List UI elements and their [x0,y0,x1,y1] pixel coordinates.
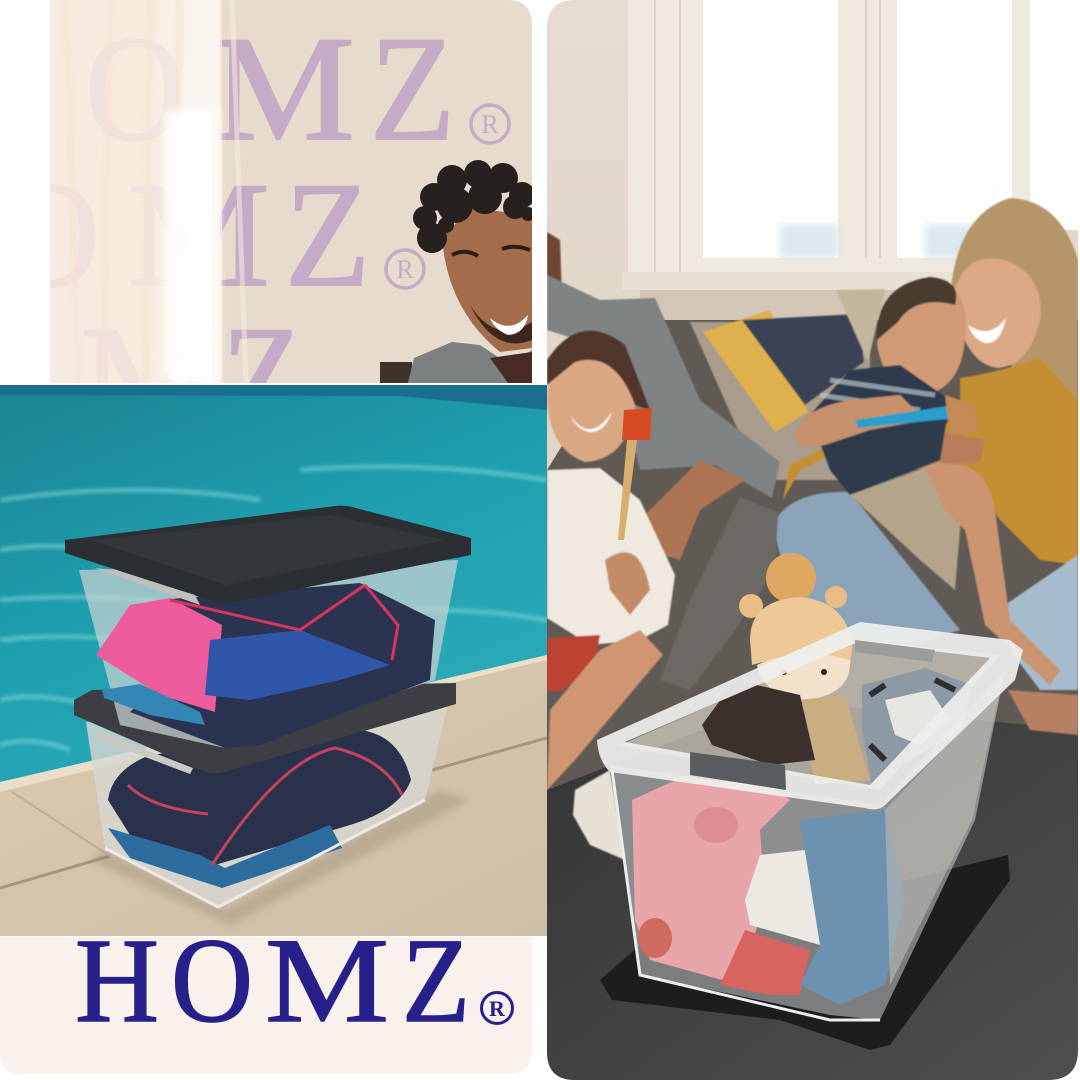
black bin base [600,855,1010,1050]
heading: repeated wall logo: M [80,296,223,462]
white plush [745,850,820,945]
leopard plush [862,668,972,785]
heading: repeated wall logo: M [212,6,355,172]
logo registered mark [482,992,512,1024]
woman [772,198,1078,735]
mallet toy [618,408,652,540]
bin right face [885,690,1000,985]
upper bin [65,506,471,748]
wall logo registered marks: R [396,255,414,284]
pool tile edge [0,385,547,410]
bin rim [597,622,1023,809]
carpet [547,700,1078,1080]
logo wordmark: M [265,914,389,1048]
heading: repeated wall logo: Z [370,6,455,172]
panel: family with toy bin [547,0,1078,1080]
curtain [0,0,246,383]
sofa and pillows [690,289,885,480]
shadow of bins [90,790,470,925]
window [622,0,1078,320]
man in grey shirt [380,160,535,383]
panel: Homz logo [0,914,532,1074]
brown plush [702,680,815,765]
lower bin [74,683,456,907]
bin body [610,670,1005,1020]
heading: repeated wall logo: Z [222,296,302,462]
blue plush [800,810,905,1005]
bin handles [690,640,935,790]
heading: repeated wall logo: O [0,152,100,318]
heading: repeated wall logo: M [127,152,270,318]
logo wordmark: H [75,914,159,1048]
bear plush [739,553,870,784]
heading: repeated wall logo [50,39,448,383]
pink pig plush [632,778,810,995]
panel: pool scene with stacked bins [0,385,547,936]
logo wordmark [75,914,470,1048]
heading: repeated wall logo: O [85,6,185,172]
toy bin with plush [597,553,1023,1050]
mid-ground shadow behind the family [547,320,1078,800]
upper lid [65,506,471,603]
man [547,232,780,690]
wall logo registered marks: R [481,110,499,139]
heading: repeated wall logo: Z [285,152,370,318]
logo wordmark: Z [402,914,470,1048]
bin inside back wall [620,640,1000,790]
curly hair [413,160,535,253]
lower lid [74,683,456,774]
logo registered mark: R [489,996,506,1021]
boy [795,277,1060,685]
pool deck [0,655,547,936]
panel: brand wall with smiling man [50,0,532,383]
wall logo registered marks [386,105,509,288]
girl [547,331,675,860]
logo wordmark: O [171,914,253,1048]
